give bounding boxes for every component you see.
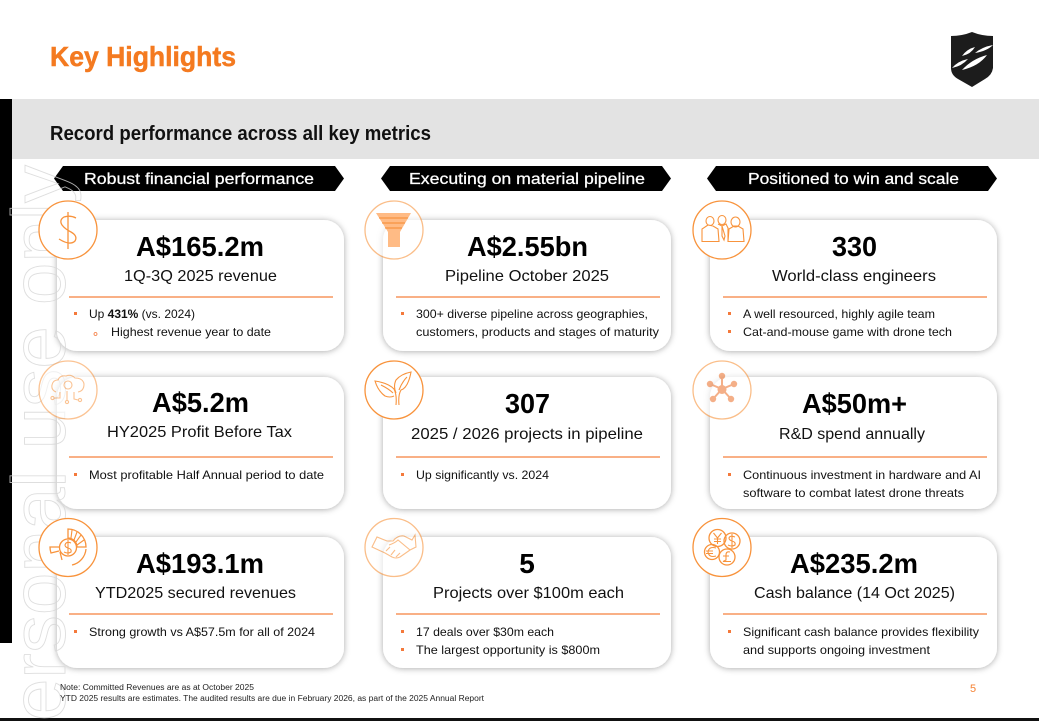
icon: handshake	[365, 518, 423, 576]
label: profit: HY2025 Profit Before Tax	[107, 424, 292, 441]
subtitle band	[12, 99, 1039, 159]
bullets: R&D: Continuous investment in hardware and AI	[743, 468, 981, 482]
column header: positioned: Positioned to win and scale	[748, 171, 959, 188]
bullets: engineers	[728, 307, 952, 339]
bullets: pipeline: customers, products and stages of maturity	[416, 325, 659, 339]
column header: pipeline: Executing on material pipeline	[409, 171, 645, 188]
icon: shield logo	[951, 32, 993, 87]
panel: engineers	[710, 220, 997, 351]
bullets: R&D: software to combat latest drone threats	[743, 486, 964, 500]
label: engineers: World-class engineers	[772, 268, 936, 285]
subtitle band: Record performance across all key metrics	[50, 123, 431, 145]
bullets: secured revenues: Strong growth vs A$57.5m for all of 2024	[89, 625, 315, 639]
icon: sprout	[365, 361, 423, 419]
column header: positioned	[707, 166, 997, 191]
bullets: R&D	[728, 468, 981, 500]
icon: revenue donut	[39, 518, 97, 576]
value: secured revenues: A$193.1m	[136, 548, 264, 579]
label: large projects: Projects over $100m each	[433, 585, 624, 602]
footnote: YTD 2025 results are estimates. The audited results are due in February 2026, as part of the 2025 Annual Report	[60, 694, 485, 703]
bullets: projects: Up significantly vs. 2024	[416, 468, 549, 482]
bullets: cash	[728, 625, 979, 657]
panel: projects	[383, 377, 671, 509]
bullets: cash: and supports ongoing investment	[743, 643, 931, 657]
title: Key Highlights	[50, 41, 236, 72]
column header: pipeline	[381, 166, 671, 191]
panel: profit	[57, 377, 344, 509]
value: large projects: 5	[519, 548, 535, 579]
icon: cloud network	[39, 361, 97, 419]
bullets: revenue: Up 431% (vs. 2024)	[89, 307, 195, 321]
bottom border	[0, 718, 1039, 721]
bullets: profit: Most profitable Half Annual period to date	[89, 468, 324, 482]
panel: large projects	[383, 537, 671, 668]
column header: financial: Robust financial performance	[84, 171, 314, 188]
value: revenue: A$165.2m	[136, 231, 264, 262]
icon: people	[693, 201, 751, 259]
bullets: revenue	[74, 307, 271, 339]
value: R&D: A$50m+	[802, 388, 907, 419]
page number: 5	[970, 683, 976, 695]
value: engineers: 330	[832, 231, 877, 262]
icon: dollar	[39, 201, 97, 259]
label: R&D: R&D spend annually	[779, 426, 925, 443]
bullets: engineers: A well resourced, highly agile team	[743, 307, 935, 321]
bullets: cash: Significant cash balance provides flexibility	[743, 625, 979, 639]
bullets: large projects	[401, 625, 600, 657]
bullets: large projects: 17 deals over $30m each	[416, 625, 554, 639]
column header: financial	[54, 166, 344, 191]
icon: funnel	[365, 201, 423, 259]
bullets: engineers: Cat-and-mouse game with drone tech	[743, 325, 952, 339]
label: pipeline: Pipeline October 2025	[445, 268, 609, 285]
icon: currency coins	[693, 518, 751, 576]
panel: cash	[710, 537, 997, 668]
value: pipeline: A$2.55bn	[467, 231, 588, 262]
value: projects: 307	[505, 388, 550, 419]
bullets: pipeline: 300+ diverse pipeline across geographies,	[416, 307, 648, 321]
icon: molecule network	[693, 361, 751, 419]
label: projects: 2025 / 2026 projects in pipeline	[411, 426, 643, 443]
value: cash: A$235.2m	[790, 548, 918, 579]
bullets: revenue: Highest revenue year to date	[111, 325, 271, 339]
left black bar	[0, 99, 12, 643]
footnote: Note: Committed Revenues are as at October 2025	[60, 683, 255, 692]
bullets: large projects: The largest opportunity is $800m	[416, 643, 600, 657]
label: revenue: 1Q-3Q 2025 revenue	[124, 268, 277, 285]
value: profit: A$5.2m	[152, 387, 249, 418]
label: secured revenues: YTD2025 secured revenues	[95, 585, 296, 602]
panel: pipeline value	[383, 220, 671, 351]
label: cash: Cash balance (14 Oct 2025)	[754, 585, 955, 602]
panel: R&D	[710, 377, 997, 509]
panel: revenue	[57, 220, 344, 351]
panel: secured revenues	[57, 537, 344, 668]
bullets: pipeline	[401, 307, 659, 339]
footnote	[60, 683, 485, 703]
